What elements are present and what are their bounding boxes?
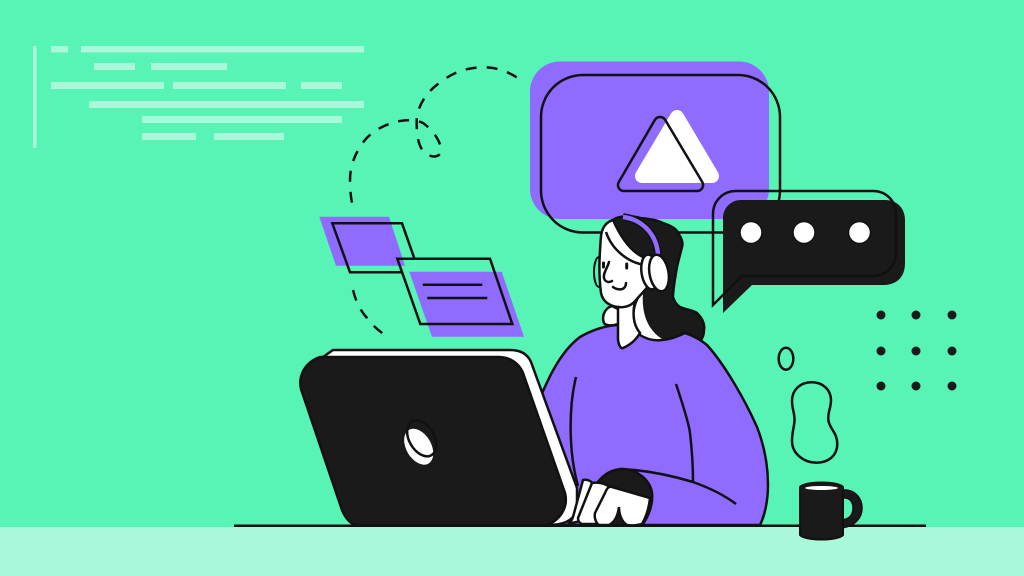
floating card: upper [319, 217, 414, 272]
middle finger [578, 483, 610, 524]
laptop back edge [323, 350, 577, 525]
dashed flight path [350, 67, 517, 335]
laptop logo [398, 415, 442, 470]
cuff [597, 469, 652, 525]
icon: triangle logo [618, 117, 712, 191]
floating card: lower [397, 259, 524, 337]
front hand [595, 487, 650, 525]
hairline [606, 232, 644, 265]
left ear [594, 257, 604, 287]
desk line [234, 524, 926, 527]
laptop [300, 350, 577, 526]
body sweater [535, 325, 768, 525]
neck [618, 301, 640, 348]
large purple speech panel [530, 62, 780, 232]
collar [603, 306, 620, 325]
white hair underlayer [634, 293, 664, 340]
chat bubble with three dots [713, 191, 905, 313]
headband [623, 217, 658, 254]
dot grid [876, 310, 956, 390]
hair [613, 216, 704, 345]
code lines decoration [33, 46, 364, 148]
sweater folds [571, 377, 736, 504]
coffee mug [800, 482, 862, 540]
woman [535, 216, 768, 525]
ear cup [639, 253, 661, 291]
face and front hair streak [599, 220, 650, 307]
hands on keyboard [568, 469, 652, 525]
laptop lid [300, 357, 566, 526]
steam shapes [779, 348, 837, 463]
floor [0, 527, 1024, 576]
eyes, nose and smile [604, 262, 627, 289]
rear finger [568, 480, 592, 524]
